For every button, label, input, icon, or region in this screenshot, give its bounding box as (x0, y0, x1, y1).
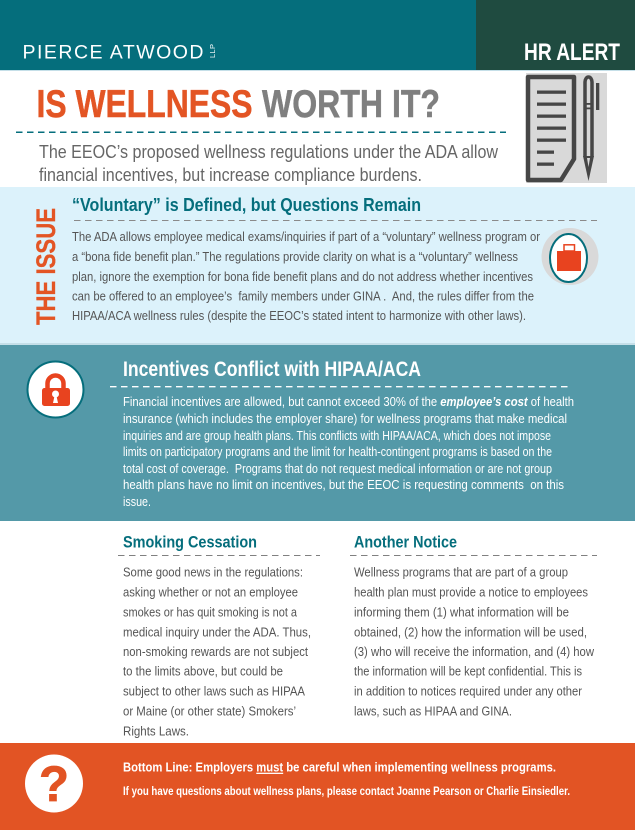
subtitle: The EEOC’s proposed wellness regulations under the ADA allow (39, 142, 499, 162)
text: smoking body (123, 564, 311, 738)
heading: incentives conflict: Incentives Conflict with HIPAA/ACA (123, 357, 421, 381)
text: smoking body: smokes or has quit smoking is not a (123, 604, 298, 620)
text: notice body: health plan must provide a notice to employees (354, 584, 588, 600)
text: issue body (72, 229, 541, 323)
subtitle: financial incentives, but increase compliance burdens. (39, 165, 422, 185)
text: issue body: a “bona fide benefit plan.” The regulations provide clarity on what is a “voluntary” wellness (72, 249, 518, 264)
text: incentives body: health plans have no limit on incentives, but the EEOC is requesting comments on this (123, 477, 564, 492)
text: notice body: laws, such as HIPAA and GINA. (354, 704, 512, 718)
text: issue body: can be offered to an employee’s family members under GINA . And, the rules differ from the (72, 288, 534, 304)
text: notice body: informing them (1) what information will be (354, 604, 569, 620)
logo: Pierce Atwood: LLP (208, 44, 217, 58)
icon: question mark (25, 754, 83, 812)
heading: smoking cessation: Smoking Cessation (123, 533, 257, 552)
icon: question mark: ? (39, 756, 69, 812)
text: notice body: obtained, (2) how the information will be used, (354, 624, 587, 640)
text: incentives body: insurance (which includes the employer share) for wellness programs that make medical (123, 411, 567, 426)
text: issue body: HIPAA/ACA wellness rules (despite the EEOC’s stated intent to harmonize with other laws). (72, 308, 526, 323)
logo: Pierce Atwood: PIERCE ATWOOD (22, 42, 204, 64)
text: incentives body: Financial incentives are allowed, but cannot exceed 30% of the employee’s cost of health (123, 394, 574, 409)
text: incentives body: inquiries and are group health plans. This conflicts with HIPAA/ACA, which does not impose (123, 428, 551, 443)
title: WORTH IT? (262, 83, 440, 126)
text: bottom line: Bottom Line: Employers must be careful when implementing wellness programs. (123, 760, 556, 775)
text: smoking body: to the limits above, but could be (123, 664, 283, 678)
text: issue body: The ADA allows employee medical exams/inquiries if part of a “voluntary” wellness program or (72, 229, 541, 244)
title: IS WELLNESS (36, 83, 252, 126)
panel: the issue (0, 187, 635, 345)
vertical label: The Issue: THE ISSUE (31, 208, 61, 325)
text: smoking body: asking whether or not an employee (123, 584, 298, 600)
text: smoking body: medical inquiry under the ADA. Thus, (123, 624, 311, 640)
text: notice body: Wellness programs that are part of a group (354, 564, 568, 580)
text: notice body: (3) who will receive the information, and (4) how (354, 644, 595, 659)
text: smoking body: or Maine (or other state) Smokers’ (123, 704, 296, 718)
icon: notepad and pen (526, 73, 607, 183)
header band (0, 0, 635, 71)
heading: voluntary: “Voluntary” is Defined, but Questions Remain (72, 194, 421, 215)
icon: briefcase (542, 228, 598, 285)
subtitle (39, 142, 499, 185)
text: incentives body (123, 394, 574, 509)
panel: incentives conflict (0, 345, 635, 521)
text: incentives body: issue. (123, 494, 151, 509)
column: another notice (350, 533, 597, 718)
text: issue body: plan, ignore the exemption for bona fide benefit plans and do not address whether incentives (72, 269, 533, 284)
heading: another notice: Another Notice (354, 533, 457, 552)
text: notice body (354, 564, 595, 718)
column: smoking cessation (118, 533, 320, 738)
icon: padlock (28, 362, 84, 418)
text: smoking body: Rights Laws. (123, 724, 189, 738)
text: incentives body: limits on participatory programs and the limit for health-contingent programs is based on the (123, 444, 552, 459)
text: smoking body: Some good news in the regulations: (123, 564, 303, 580)
text: smoking body: non-smoking rewards are not subject (123, 644, 308, 659)
text: notice body: the information will be kept confidential. This is (354, 664, 582, 678)
panel: bottom line (0, 743, 635, 830)
text: incentives body: total cost of coverage. Programs that do not request medical information or are not group (123, 461, 552, 476)
text: smoking body: subject to other laws such as HIPAA (123, 684, 305, 698)
title (36, 83, 440, 126)
text: notice body: in addition to notices required under any other (354, 684, 583, 698)
